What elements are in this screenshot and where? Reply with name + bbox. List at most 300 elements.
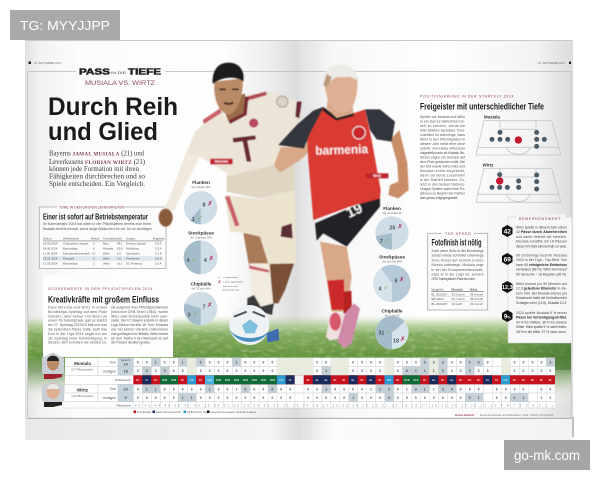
competition band: DFB: [171, 378, 177, 382]
fact 42: 42 Pässe durch Abwehrreihen: [516, 230, 567, 234]
goals table: 9:2 A: [155, 242, 162, 246]
sock: [249, 263, 274, 313]
intro text: Leverkusens FLORIAN WIRTZ (21): [49, 158, 146, 166]
body text: sind, findet auf seinem Ersten: [432, 258, 484, 262]
empty cells in grass: [187, 358, 510, 375]
fact 42: 42: [504, 228, 511, 235]
player: Wirtz: 19: [344, 201, 365, 222]
goals table: Wettbewerb: [63, 236, 79, 240]
competition band: BL: [495, 378, 499, 382]
competition band: DFB: [225, 378, 230, 382]
name tag: Wirtz: [373, 174, 381, 178]
competition band: BL: [522, 378, 526, 382]
goals table: Dinamo Zagreb: [126, 242, 146, 246]
pie: Stockpässe Wirtz: [373, 255, 411, 302]
body text: wenn sie beide zusammen: [420, 174, 465, 178]
goals table: 16:1: [117, 262, 123, 266]
competition band: BL: [468, 378, 472, 382]
eyes: [219, 87, 239, 92]
pie: Chipbälle Wirtz: Vel. 2 auf 36: [385, 313, 400, 317]
body text: League-Spielen waren ihre Po-: [420, 187, 465, 191]
table legend: Champions League / Europa League: [210, 410, 257, 414]
body text: war bei sieben Vierteln vollkommen: [111, 328, 168, 332]
pie: Flanken Musiala: 1: [192, 217, 195, 223]
pie: Flanken Wirtz: [375, 206, 409, 250]
goals table: Ergebnis: [153, 236, 165, 240]
pie: Chipbälle Wirtz: ✓: [385, 328, 391, 335]
rear leg: [270, 263, 294, 303]
pie: Flanken Wirtz: Flanken: [383, 206, 401, 211]
pie legend: Spielzeit der Liga: [223, 288, 240, 291]
competition band: BL: [343, 378, 346, 382]
fact 9 percent: 2024 spielte Musiala 9 % seiner: [516, 311, 568, 315]
pie: Chipbälle Musiala: Chipbälle: [191, 282, 212, 287]
body text: und gut Bayern im Hinblick. Wirtz kommt: [111, 332, 168, 336]
pie: Flanken Musiala: [184, 180, 217, 224]
goals table: 2: [93, 262, 95, 266]
body text: Niveau unterwegs. Musiala zeigt: [432, 263, 484, 267]
pie: Flanken Wirtz: 7: [380, 239, 383, 245]
heading: Einer ist sofort auf Betriebstemperatur: [43, 212, 148, 222]
body text: [432, 249, 484, 281]
goals table: 3:2 A: [155, 262, 162, 266]
body text: in ein starres taktisches Kor-: [420, 120, 465, 124]
body text: letzt in den beiden Nations-: [420, 182, 465, 186]
player: Musiala: [159, 63, 302, 315]
section badge: Pass in die Tiefe: PASS: [79, 66, 110, 76]
fact 9 percent: 43 % ins mittlere, 38 % ins vordere: [516, 320, 567, 324]
goals table: Testspiel: [63, 256, 75, 260]
fact 42: und damit lieferte die meisten.: [516, 235, 567, 239]
sleeves: [278, 107, 324, 149]
jersey: [307, 107, 381, 220]
goals table: Bundesliga: [63, 262, 78, 266]
speed table: 33 km/h: [452, 302, 463, 306]
pie: Stockpässe Wirtz: 6: [395, 278, 398, 284]
panel: Tore in den ersten zehn Minuten: [39, 204, 166, 268]
competition band: EL: [316, 378, 319, 382]
speed table: [431, 288, 484, 306]
body text: dass er in der Lage ist, seinem: [432, 272, 484, 276]
pie legend: ✗: [218, 279, 222, 285]
arm: [163, 130, 200, 211]
speed table: Vergleich: [432, 288, 444, 292]
body text: in bei der Europameisterschaft,: [432, 268, 484, 272]
competition band: [133, 375, 555, 384]
pie: Chipbälle Wirtz: Chipbälle: [382, 308, 403, 313]
Wirtz assists row: 00000110000000000000000100002000000001000110: [137, 396, 552, 400]
kicker: TORE IN DEN ERSTEN ZEHN MINUTEN: [59, 206, 125, 210]
body text: 18. Spieltag ohne Torbeteiligung. In: [48, 336, 107, 340]
speed table: EM 2024: [432, 297, 444, 301]
body text: zuletzt etwas schneller unterwegs: [432, 254, 484, 258]
right arm: [388, 130, 409, 198]
body text: sie aufgrund ihrer Pflichtspielminuten: [111, 306, 168, 310]
competition band: CL: [289, 378, 293, 382]
panel: Freigeister: [420, 94, 544, 200]
row labels and totals: Tore: [109, 360, 116, 364]
intro text: Spiele entscheiden. Ein Vergleich.: [49, 180, 145, 188]
competition band: EL: [432, 378, 436, 382]
player row: Wirtz: (46 Pflichtspiele): [71, 394, 94, 398]
body text: der EM wurde Wirtz links und: [420, 164, 465, 168]
pie: Chipbälle Wirtz: 31: [378, 330, 384, 336]
goals table: 2:0 A: [155, 256, 162, 260]
goals table: Wirtz: [103, 256, 110, 260]
goals table: Gegner: [126, 236, 136, 240]
pie: Flanken Wirtz: 25: [389, 226, 395, 232]
face: [214, 78, 243, 115]
speed table: Musiala: [452, 288, 463, 292]
goals table: Torschütze: [103, 236, 117, 240]
body text: standen, aber keiner von ihnen an: [48, 314, 107, 318]
formation: Wirtz: Wirtz: [483, 163, 493, 168]
goals table: 3:2 A: [155, 246, 162, 250]
goals table: Zeit: [117, 236, 122, 240]
fact 42: Wirtz spielte in diesem Jahr schon: [516, 226, 567, 230]
competition band: EL: [325, 378, 328, 382]
heading: Freigeister mit unterschiedlicher Tiefe: [420, 100, 544, 112]
body text: Liga-Saison bereits 16 Tore, Musiala: [111, 323, 168, 327]
row labels and totals: 14: [123, 362, 129, 366]
intro text: Fähigkeiten durchbrechen und so: [49, 173, 146, 181]
competition band: DFB: [216, 378, 221, 382]
goals table: 11.06.2024: [43, 252, 58, 256]
source line: Expected Assists und Passdaten: Opta / Stand: 23.09.2024: [480, 413, 554, 417]
fact 69: 2024 in der Liga - Top-Wert. Nur: [516, 258, 568, 262]
row labels and totals: Vorlagen: [103, 370, 116, 374]
telekom logo: [233, 135, 256, 162]
pie legend: ✓: [218, 276, 221, 281]
main title: und Glied: [48, 119, 158, 146]
pie: Chipbälle Musiala: 7: [203, 304, 206, 310]
goals table: Minute: [91, 236, 100, 240]
body text: aufgestellt wurde als Musiala. Be-: [420, 151, 465, 155]
body text: Duo in der Liga 2024 sagte nur am: [48, 332, 107, 336]
neck: [222, 93, 245, 122]
goals table: Champions League: [63, 242, 88, 246]
pie: Flanken Wirtz: ✗: [397, 223, 403, 230]
goals table: Frankreich: [126, 256, 140, 260]
body text: aber genau entgegengesetzt.: [420, 196, 458, 200]
pie: Flanken Wirtz: Vel. 22 Anteil 46: [382, 211, 402, 215]
page date left: 30. SEPTEMBER 2024: [34, 61, 61, 65]
fact 9 percent: 38 % in die Mitte, 57 % nach vorne.: [516, 330, 567, 334]
pie: Flanken Musiala: Flanken: [192, 180, 210, 185]
body text: fischer sagen ein Sechser auf: [420, 156, 465, 160]
fact 9 percent: Pässe ins Verteidigungsdrittel,: [516, 316, 567, 320]
football: [229, 305, 279, 345]
body text: spielte und etwas offensiver: [420, 146, 466, 150]
kicker: TOP-SPEED: [445, 232, 471, 236]
competition band: BL: [136, 378, 140, 382]
pie: Chipbälle Musiala: ✓: [193, 310, 198, 317]
pie: Stockpässe Wirtz: 4: [379, 286, 382, 292]
body text: einem Tor beteiligt war, gab es zuletzt: [48, 319, 107, 323]
speed table: 34,4 km/h: [470, 292, 484, 296]
intro text: [49, 150, 146, 188]
competition band: Pok: [387, 378, 392, 382]
goals table: 23.03.2024: [43, 256, 58, 260]
speed table: 35,3 km/h: [470, 297, 484, 301]
fact 12,3: Schläger mehr (12,5). Musiala 10,3.: [516, 301, 567, 305]
competition band: DFB: [162, 378, 168, 382]
player row: Wirtz: [42, 380, 94, 407]
speed table: 35,7 km/h: [452, 297, 465, 301]
hair: [213, 63, 244, 84]
competition band: BL: [441, 378, 445, 382]
page date left: [28, 61, 61, 65]
goals table: Mus.: [103, 242, 109, 246]
competition band: DFB: [234, 378, 239, 382]
description: Im Kalenderjahr 2024 traf allein in vier Pflichtspielen bereits eine frühe: [43, 222, 151, 226]
table legend: DFB-Pokal / Sup.: [187, 410, 209, 414]
pie: Chipbälle Wirtz: 18: [393, 338, 399, 344]
competition band: BL: [531, 378, 535, 382]
pie: Stockpässe Musiala: Stockpässe: [188, 231, 214, 236]
fact 12,3: sem Jahr. Bei Musiala sind es pro: [516, 291, 567, 295]
name tag: Musiala: [215, 160, 229, 164]
intro text: können jede Formation mit ihren: [49, 165, 139, 173]
page date right: 30. SEPTEMBER 2024: [538, 61, 565, 65]
body text: zustellen ist allerdings, dass: [420, 133, 465, 137]
description: Musiala bereits einmal, sonst lange Abläuchen für ein Tor zu benötigen.: [43, 227, 153, 231]
pie: Flanken Musiala: ✗: [207, 201, 213, 208]
competition band: EL: [352, 378, 355, 382]
body text: Wirtz in den Pflichtspielen in: [420, 138, 465, 142]
fact 69: [502, 253, 568, 276]
fact 69: 69: [504, 256, 511, 263]
patch: [277, 96, 288, 107]
body text: ihrer Stärken berauben. Fest-: [420, 128, 465, 132]
watermark: go-mk.com: go-mk.com: [514, 448, 580, 463]
body text: Bundesliga-Spieltag auf dem Platz: [48, 310, 107, 314]
goals table: Schottland: [126, 252, 140, 256]
goals table: 6: [93, 246, 95, 250]
competition band: BL: [361, 378, 364, 382]
body text: Auch wenn Wirtz in der Bundesliga: [432, 249, 484, 253]
pie charts Wirtz: [373, 206, 411, 349]
competition band: BL: [181, 378, 185, 382]
fact 9 percent: [502, 310, 568, 334]
row labels and totals: Pflichtspiele: [116, 404, 131, 408]
competition band: BL: [549, 378, 553, 382]
crest: [353, 126, 365, 139]
goals table: SC Freiburg: [126, 262, 142, 266]
formation: Musiala: Musiala: [484, 115, 500, 120]
body text: Wirtz zwei Scorerpunkte mehr sam-: [111, 314, 168, 318]
row labels and totals: 9: [124, 395, 127, 400]
row labels and totals: 20: [123, 386, 129, 392]
body text: diesem Jahr meist eher ohne: [420, 142, 465, 146]
pie: Stockpässe Musiala: 4: [204, 258, 207, 264]
pie: Stockpässe Musiala: ✓: [191, 256, 197, 263]
competition band: BL: [307, 378, 310, 382]
row labels and totals: Wettbewerb: [115, 378, 131, 382]
fact 12,3: 12,3 gelaufene Kilometer in die-: [516, 287, 567, 291]
fact 69: 50 Versuche – 18 klappten (36 %).: [516, 272, 567, 276]
main title: Durch Reih: [48, 94, 178, 121]
pie legend: Teils da zu dem: [223, 286, 238, 288]
section badge: Pass in die Tiefe: [76, 66, 165, 76]
pie: Flanken Musiala: ✓: [197, 215, 203, 222]
table base: [65, 358, 555, 408]
table legend: Nationalmannschaft: [156, 410, 181, 414]
fact 12,3: [502, 281, 567, 305]
competition band: BL: [423, 378, 427, 382]
competition band: Pok: [503, 378, 509, 382]
body text: DFB-Trainingsteam Pace ist unten.: [432, 277, 476, 281]
body text: melte. Der FC Bayern erzielte in dieser: [111, 319, 169, 323]
body text: Dass Musiala und Wirtz in einem: [48, 306, 107, 310]
sponsor: barmenia: [315, 142, 368, 158]
bayern crest: [249, 118, 259, 128]
body text: Spieler wie Musiala und Wirtz: [420, 115, 465, 119]
name tag: [210, 159, 233, 164]
magazine page background: [25, 40, 574, 440]
player row: Musiala: Musiala: [74, 361, 91, 366]
body text: an den Treffern der Werkself ist auf: [111, 336, 168, 340]
body text: 36 Prozent deutlich größer.: [111, 341, 151, 345]
fact 12,3: Wirtz kommt pro 90 Minuten auf: [516, 282, 567, 286]
Wirtz goals row: 01100000100100000000100001200101100000000000: [137, 387, 552, 391]
pie: Stockpässe Wirtz: Vel. Det 4,6 34%: [382, 260, 403, 264]
competition band: BL: [540, 378, 544, 382]
match number row: 46 45 44 43 42 41 40 39 38 37 36 35 34 33 32 31 30 29 28 27 26 25 24 23 22 21 20 19 18 17 16 15 14 13 12 11 10 9 8 7 6 5 4 3 2 1: [135, 404, 554, 408]
competition band: EL: [486, 378, 490, 382]
body text: sett zu stecken, würde sie: [420, 124, 465, 128]
goals table: 2:0: [117, 256, 121, 260]
goals table: 10: [92, 252, 96, 256]
body text: (inklusive DFB-Team 1983), wobei: [111, 310, 168, 314]
competition band: Pok: [189, 378, 195, 382]
pie: Stockpässe Musiala: ✗: [209, 256, 214, 263]
legs: [320, 242, 352, 312]
competition band: Sup: [207, 378, 212, 382]
goals table: 2: [93, 242, 95, 246]
pie: Chipbälle Musiala: ✗: [207, 302, 212, 309]
name tag: [366, 173, 388, 178]
main title: [48, 94, 178, 146]
fact 9 percent: 9%: [504, 313, 511, 320]
shoes: [326, 313, 347, 341]
goals table: 2: [93, 256, 95, 260]
competition band: BL: [199, 378, 203, 382]
pie legend: = angekommen: [223, 277, 239, 279]
pie: Flanken Musiala: Vel. Flanke 12%: [191, 185, 211, 189]
Musiala goals row: 0010010000100000000000000020000000002: [137, 360, 552, 364]
goals table: Wirtz: [103, 262, 110, 266]
goals table: Musiala: [103, 246, 113, 250]
row labels and totals: [103, 358, 131, 408]
hand: [159, 209, 173, 227]
section badge: Pass in die Tiefe: TIEFE: [128, 66, 161, 76]
section badge: Pass in die Tiefe: IN DIE: [111, 71, 127, 75]
pie: Chipbälle Musiala: Vel. 22 auf 4,4%: [191, 287, 211, 291]
row labels and totals: Tore: [109, 387, 116, 391]
formation: Musiala: [476, 115, 561, 155]
competition band: BL: [513, 378, 517, 382]
goals table: Wolfsburg: [126, 246, 139, 250]
grass strip: [28, 316, 571, 406]
goals table: [43, 236, 165, 266]
competition band: Pok: [279, 378, 284, 382]
watermark: TG: TG: MYYJJPP: [20, 19, 110, 33]
hair: [323, 65, 357, 87]
row labels and totals: 18: [123, 368, 129, 374]
pie: Stockpässe Wirtz: ✓: [384, 284, 389, 291]
kicker: POSITIONIERUNG IN DER STARTELF 2024: [420, 94, 514, 98]
goals table: 5:1 H: [155, 252, 162, 256]
body text: dem Platz gestanden hatte. Bei: [420, 160, 465, 164]
formation: Wirtz: [476, 163, 561, 202]
source line: kicker.de/wirtz: [455, 413, 475, 417]
pie: Stockpässe Wirtz: Stockpässe: [379, 255, 405, 260]
speed table: BL 2024/25: [432, 302, 447, 306]
pie: Chipbälle Musiala: 3: [188, 313, 191, 319]
player row: Wirtz: Wirtz: [77, 388, 89, 392]
Musiala assists row: 0000000000000000100000011102000010000: [137, 369, 552, 373]
competition band: BL: [378, 378, 382, 382]
speed table: 34,2 km/h: [452, 292, 465, 296]
competition band: BL: [154, 378, 158, 382]
goals table: 15:8: [117, 246, 123, 250]
body text: Musiala rechts eingesetzt,: [420, 169, 465, 173]
goals table: 1:0: [117, 252, 121, 256]
player: Wirtz: [274, 65, 409, 348]
neck and face: [327, 93, 353, 118]
goals table: 24.08.2024: [43, 246, 58, 250]
body text: am 27. Spieltag 2023/24 Mal und war: [48, 323, 108, 327]
kicker: SCORERWERTE IN DEN PFLICHTSPIELEN 2024: [48, 287, 153, 291]
competition band: EL: [450, 378, 454, 382]
row labels and totals: Vorlagen: [103, 396, 116, 400]
intro text: Bayerns JAMAL MUSIALA (21) und: [49, 150, 144, 158]
competition band: DFB: [270, 378, 275, 382]
row labels and totals: gesamt: [121, 358, 130, 362]
goals table: Datum: [43, 236, 52, 240]
competition band: CL: [145, 378, 149, 382]
goals table: 94:1: [117, 242, 123, 246]
body text: [48, 306, 169, 345]
player row: Musiala: [42, 352, 94, 379]
shorts: [315, 195, 380, 247]
goals table: 18.09.2024: [43, 242, 58, 246]
competition band: DFB: [404, 378, 410, 382]
body text: diesem Jahr kommen die beiden zu-: [48, 341, 107, 345]
pie: Stockpässe Musiala: 4: [187, 258, 190, 264]
pie: Chipbälle Wirtz: [375, 308, 409, 349]
fact 69: verweisen (58 %). Wirtz kommt auf: [516, 268, 567, 272]
body text: sitionen zu Beginn der Partien: [420, 192, 465, 196]
competition band: DFB: [243, 378, 248, 382]
speed table: Wirtz: [470, 288, 478, 292]
pie: Stockpässe Musiala: [184, 231, 218, 274]
fact 69: 69 Dribblings bestritt Musiala: [516, 254, 567, 258]
pie: Chipbälle Wirtz: ✗: [400, 336, 405, 343]
player row: Musiala: (27 Pflichtspiele): [71, 368, 94, 372]
goals table: Wirtz: [103, 252, 110, 256]
description: [43, 222, 153, 231]
watermark: TG: [10, 10, 120, 40]
heading: Fotofinish ist nötig: [432, 238, 482, 248]
speed table: BL 2023/24: [432, 292, 447, 296]
body text: [420, 115, 466, 200]
goals table: Europameisterschaft: [63, 252, 90, 256]
panel: Top-Speed: [428, 231, 488, 310]
competition band: DFB: [252, 378, 257, 382]
pie: Flanken Wirtz: ✓: [385, 237, 390, 244]
